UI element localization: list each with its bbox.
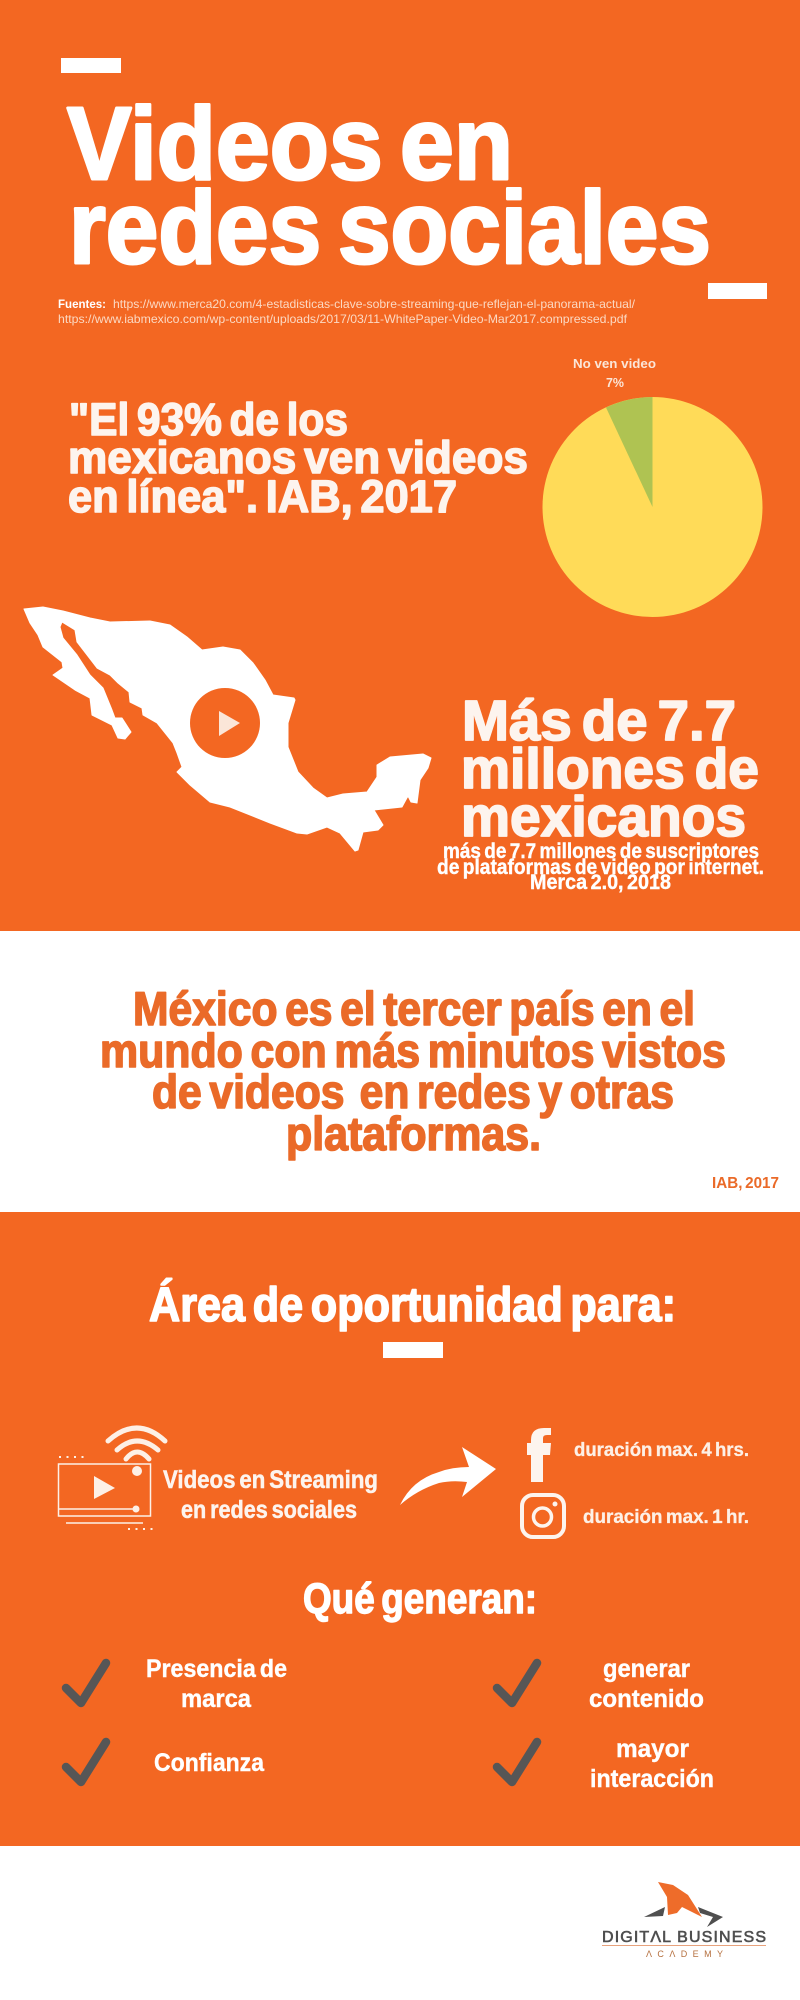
statement heading: mundo con más minutos vistos xyxy=(100,1024,726,1077)
benefit: presencia de marca: marca xyxy=(181,1685,252,1713)
quote: 93% of Mexicans watch videos online: "El 93% de los xyxy=(69,394,348,445)
benefit: presencia de marca xyxy=(146,1655,287,1713)
heading: que generan: Qué generan: xyxy=(303,1575,537,1623)
logo: digital business academy: DIGITΛL BUSINESS xyxy=(602,1929,766,1946)
benefit: generar contenido: contenido xyxy=(589,1685,704,1713)
benefit: mayor interaccion xyxy=(590,1735,714,1793)
title: Videos en xyxy=(67,86,513,201)
panel: white footer xyxy=(0,1846,800,2000)
stat detail text xyxy=(437,840,764,894)
pie label: no ven video 7%: 7% xyxy=(606,375,624,390)
quote: 93% of Mexicans watch videos online: mexicanos ven videos xyxy=(68,432,528,483)
label: videos en streaming xyxy=(163,1466,378,1524)
sources: Fuentes: xyxy=(58,297,106,311)
label: instagram duration: duración max. 1 hr. xyxy=(583,1507,749,1528)
icon: check confianza xyxy=(66,1742,106,1782)
statement heading: plataformas. xyxy=(286,1107,541,1160)
icon: check mayor interaccion xyxy=(497,1742,537,1782)
label: videos en streaming: Videos en Streaming xyxy=(163,1466,378,1494)
benefit: generar contenido xyxy=(589,1655,704,1713)
icon: streaming video with wifi xyxy=(58,1428,165,1529)
stat detail text: Merca 2.0, 2018 xyxy=(530,871,671,894)
panel: white statement band xyxy=(0,931,800,1212)
icon: check presencia de marca xyxy=(66,1663,106,1703)
statement heading: México es el tercer país en el xyxy=(133,982,695,1035)
statement heading: de videos en redes y otras xyxy=(152,1065,674,1118)
sources xyxy=(58,297,636,326)
sources: https://www.merca20.com/4-estadisticas-clave-sobre-streaming-que-reflejan-el-panorama-actual/ xyxy=(113,297,636,311)
icon: map of Mexico with play button xyxy=(24,607,431,851)
benefit: presencia de marca: Presencia de xyxy=(146,1655,287,1683)
stat detail text: más de 7.7 millones de suscriptores xyxy=(443,840,759,863)
panel: orange hero background xyxy=(0,0,800,931)
statement heading xyxy=(100,982,726,1160)
icon: facebook xyxy=(527,1428,551,1482)
sources: https://www.iabmexico.com/wp-content/uploads/2017/03/11-WhitePaper-Video-Mar2017.compressed.pdf xyxy=(58,312,628,326)
logo: digital business academy xyxy=(602,1882,766,1959)
accent bar: below section heading xyxy=(383,1342,443,1358)
label: facebook duration: duración max. 4 hrs. xyxy=(574,1440,749,1461)
pie chart: 93% watch, 7% do not xyxy=(542,356,762,617)
benefit: mayor interaccion: mayor xyxy=(616,1735,689,1763)
big stat: 7.7 million Mexicans: millones de xyxy=(461,737,759,801)
quote: 93% of Mexicans watch videos online: en línea". IAB, 2017 xyxy=(68,471,457,522)
icon: instagram xyxy=(522,1495,564,1537)
accent bar: top left xyxy=(61,58,121,73)
benefit: generar contenido: generar xyxy=(603,1655,690,1683)
stat detail text: de plataformas de video por internet. xyxy=(437,856,764,879)
big stat: 7.7 million Mexicans: Más de 7.7 xyxy=(462,689,736,753)
quote: 93% of Mexicans watch videos online xyxy=(68,394,528,522)
label: videos en streaming: en redes sociales xyxy=(181,1496,357,1524)
panel: orange opportunity section xyxy=(0,1212,800,1846)
icon: check generar contenido xyxy=(497,1663,537,1703)
arrow: curved to social networks xyxy=(400,1447,496,1505)
benefit: confianza: Confianza xyxy=(154,1749,265,1777)
benefit: mayor interaccion: interacción xyxy=(590,1765,714,1793)
statement source: IAB, 2017 xyxy=(712,1175,779,1192)
logo: digital business academy: ΛCΛDEMY xyxy=(646,1949,723,1959)
benefit checks xyxy=(66,1663,537,1782)
pie label: no ven video 7% xyxy=(573,356,656,390)
pie label: no ven video 7%: No ven video xyxy=(573,356,656,371)
title xyxy=(67,86,711,285)
big stat: 7.7 million Mexicans xyxy=(461,689,759,849)
big stat: 7.7 million Mexicans: mexicanos xyxy=(461,785,746,849)
accent bar: below title right xyxy=(708,283,767,299)
section heading: area de oportunidad: Área de oportunidad para: xyxy=(149,1278,676,1332)
title: redes sociales xyxy=(69,170,711,285)
